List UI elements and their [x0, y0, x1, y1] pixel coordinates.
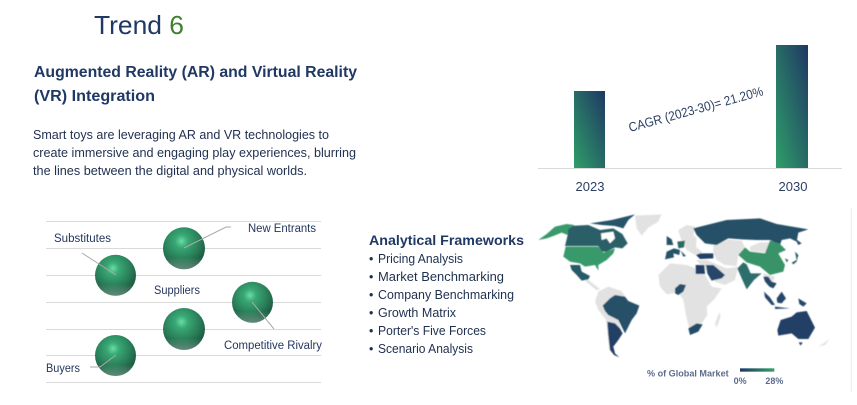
sphere: buyers: [95, 335, 136, 376]
list items: Growth Matrix: [378, 306, 457, 320]
list items: Market Benchmarking: [378, 270, 504, 284]
description text: the lines between the digital and physical worlds.: [33, 163, 307, 178]
Southeast Asia: [763, 277, 777, 288]
Italy: [681, 251, 686, 257]
label: new entrants: New Entrants: [248, 223, 316, 235]
France and Spain: [665, 248, 680, 259]
UK: [667, 236, 673, 245]
list items: Pricing Analysis: [378, 252, 463, 266]
list items: •: [369, 324, 373, 338]
Germany: [677, 241, 685, 248]
heading: (VR) Integration: [34, 88, 155, 105]
Saudi Arabia: [706, 265, 725, 281]
description text: create immersive and engaging play experiences, blurring: [33, 145, 356, 160]
list items: •: [369, 342, 373, 356]
label: buyers: Buyers: [46, 363, 80, 375]
CAGR label: CAGR (2023-30)= 21.20%: [627, 83, 765, 135]
label 2023: 2023: [576, 179, 604, 194]
Kamchatka: [795, 238, 802, 245]
map legend: [647, 368, 783, 386]
title: Trend 6: [94, 10, 184, 40]
Turkey: [696, 253, 713, 259]
Canada: [565, 225, 628, 252]
USA: [563, 247, 615, 271]
Mexico: [570, 265, 590, 281]
Australia: [777, 311, 815, 339]
heading: [34, 64, 357, 105]
label: suppliers: Suppliers: [154, 285, 200, 297]
India: [737, 262, 762, 289]
South Africa: [688, 323, 703, 335]
legend minimum: 0%: [734, 376, 747, 386]
list items: Scenario Analysis: [378, 342, 473, 356]
Canadian Arctic islands: [590, 214, 635, 228]
Russia: [693, 218, 808, 245]
sphere: competitive rivalry: [232, 282, 273, 323]
list items: Porter's Five Forces: [378, 324, 486, 338]
Hudson Bay: [601, 232, 615, 243]
list items: •: [369, 288, 373, 302]
heading: Augmented Reality (AR) and Virtual Reality: [34, 64, 357, 81]
Argentina: [607, 322, 623, 357]
frameworks heading: Analytical Frameworks: [369, 232, 524, 248]
sphere: suppliers: [163, 308, 205, 350]
sphere: substitutes: [95, 255, 136, 296]
bar 2030: [776, 45, 808, 168]
Indonesia: [764, 292, 775, 305]
Egypt: [696, 265, 705, 274]
legend maximum: 28%: [765, 376, 783, 386]
legend title: % of Global Market: [647, 368, 729, 378]
description text: [33, 127, 356, 178]
legend colour bar: [740, 368, 774, 372]
world map: [538, 208, 851, 392]
Alaska: [538, 224, 574, 240]
Korea: [785, 258, 788, 262]
Japan: [792, 252, 798, 264]
label: competitive rivalry: Competitive Rivalry: [224, 340, 322, 352]
grey countries: [585, 214, 830, 352]
bar 2023: [574, 91, 605, 168]
sphere: new entrants: [163, 227, 205, 269]
list items: •: [369, 252, 373, 266]
list items: •: [369, 270, 373, 284]
list items: •: [369, 306, 373, 320]
bar chart: market growth: [538, 45, 842, 194]
Nigeria: [675, 284, 686, 295]
China: [738, 241, 786, 275]
label 2030: 2030: [779, 179, 807, 194]
list items: [369, 252, 514, 356]
Porter's five forces diagram: [46, 222, 322, 382]
label: substitutes: Substitutes: [54, 233, 111, 245]
list items: Company Benchmarking: [378, 288, 514, 302]
description text: Smart toys are leveraging AR and VR technologies to: [33, 127, 329, 142]
analytical frameworks list: [369, 232, 524, 356]
Brazil: [603, 295, 639, 333]
